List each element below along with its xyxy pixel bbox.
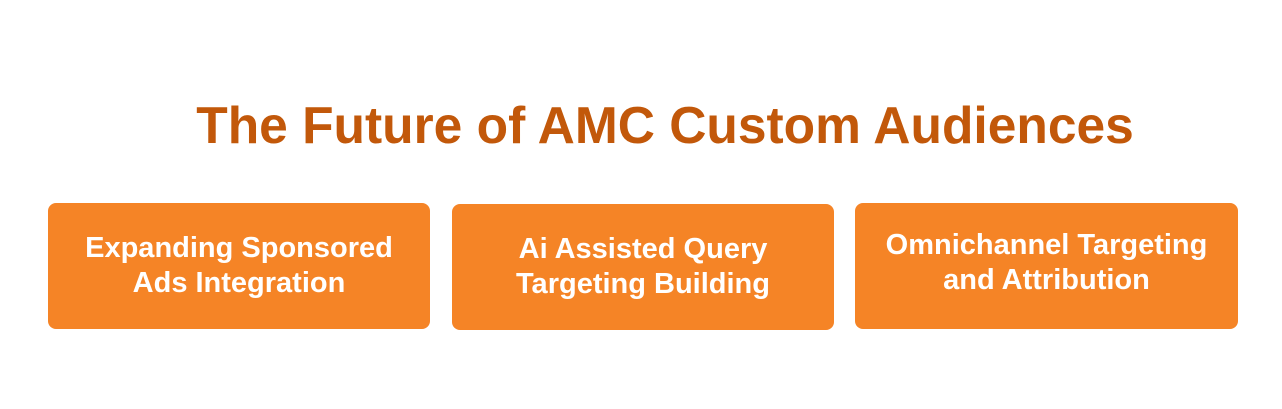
- card: ai query: Ai Assisted Query: [519, 233, 767, 265]
- card: ai query: [452, 204, 834, 330]
- card: sponsored ads: [48, 203, 430, 329]
- card: omnichannel: and Attribution: [943, 264, 1150, 296]
- card: omnichannel: Omnichannel Targeting: [886, 229, 1207, 261]
- card: sponsored ads: Expanding Sponsored: [85, 232, 393, 264]
- card: sponsored ads: Ads Integration: [133, 267, 345, 299]
- card: omnichannel: [855, 203, 1238, 329]
- title: The Future of AMC Custom Audiences: [196, 96, 1134, 154]
- card: ai query: Targeting Building: [516, 268, 770, 300]
